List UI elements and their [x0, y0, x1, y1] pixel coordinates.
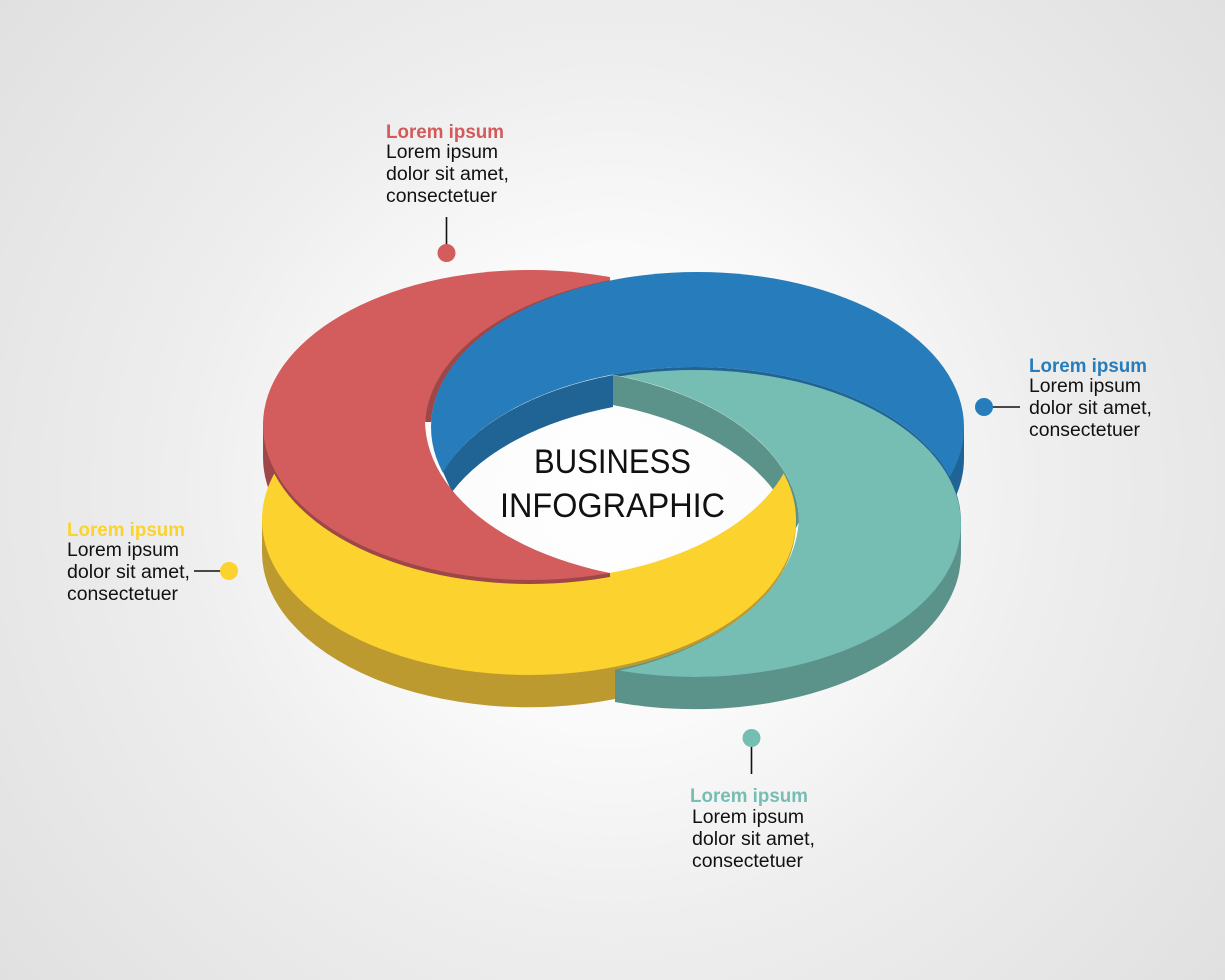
- center title: INFOGRAPHIC: [500, 487, 725, 525]
- center title: BUSINESS: [534, 443, 691, 481]
- callout: yellow: Lorem ipsum: [67, 520, 185, 541]
- callout: blue: consectetuer: [1029, 420, 1141, 441]
- callout: red: consectetuer: [386, 186, 498, 207]
- callout: teal: dolor sit amet,: [692, 829, 815, 850]
- red segment side wall: [263, 425, 330, 525]
- callout: teal: Lorem ipsum: [692, 807, 804, 828]
- callout: teal: Lorem ipsum: [690, 786, 808, 807]
- blue segment side wall: [900, 427, 964, 534]
- callout: yellow: consectetuer: [67, 584, 179, 605]
- blue segment inner wall: [443, 375, 613, 492]
- teal segment side wall: [615, 522, 961, 709]
- callout: red: [386, 122, 509, 262]
- callout: blue: Lorem ipsum: [1029, 376, 1141, 397]
- teal segment top face: [613, 367, 961, 677]
- blue segment top face: [431, 272, 964, 477]
- callout: teal: consectetuer: [692, 851, 804, 872]
- red segment inner shadow band: [425, 279, 610, 427]
- ring diagram: [262, 270, 964, 709]
- yellow segment side wall: [262, 520, 615, 707]
- center title: [500, 443, 725, 525]
- callout: red: Lorem ipsum: [386, 142, 498, 163]
- callout: yellow: dolor sit amet,: [67, 562, 190, 583]
- callout: teal: [690, 729, 815, 872]
- teal segment inner wall: [613, 375, 799, 528]
- callout: red: Lorem ipsum: [386, 122, 504, 143]
- callout: yellow: [67, 520, 238, 605]
- yellow segment top face: [262, 473, 796, 675]
- callout: yellow: Lorem ipsum: [67, 540, 179, 561]
- callout: blue: Lorem ipsum: [1029, 356, 1147, 377]
- callout: red: dolor sit amet,: [386, 164, 509, 185]
- callout: blue: dolor sit amet,: [1029, 398, 1152, 419]
- red segment top face: [263, 270, 610, 584]
- callout: blue: [975, 356, 1152, 441]
